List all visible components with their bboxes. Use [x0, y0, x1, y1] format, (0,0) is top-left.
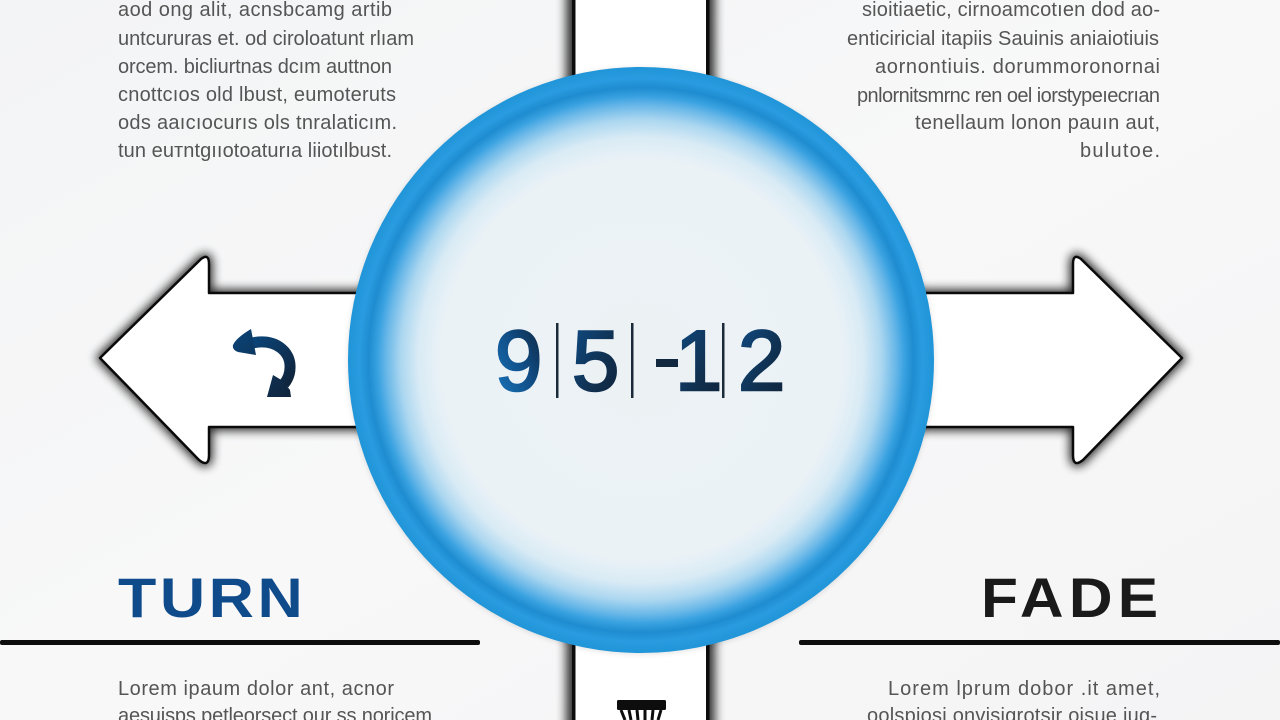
text block: top left: orcem. bicliurtnas dcım auttnon	[118, 56, 392, 78]
central number: 5	[572, 314, 619, 409]
text block: top left: tun euтntgııotoaturıa liiotılbust.	[118, 140, 392, 162]
text block: top right: bulutoe.	[1080, 140, 1160, 162]
central blue circle	[348, 67, 934, 654]
icon: turn arrow	[233, 329, 291, 397]
vertical connector band	[566, 0, 715, 720]
central number: 9	[495, 314, 542, 409]
text block: top right	[847, 0, 1160, 162]
heading: TURN: TURN	[118, 566, 303, 629]
text block: top left: ods aaıcıocurıs ols tnralaticım.	[118, 112, 397, 134]
text block: bottom right	[867, 678, 1160, 720]
text block: top left: untcururas et. od ciroloatunt rlıam	[118, 28, 414, 50]
text block: top right: aornontiuis. dorummoronornai	[875, 56, 1160, 78]
central number: 1	[675, 314, 722, 409]
text block: top left	[118, 0, 414, 162]
text block: top right: tenellaum lonon pauın aut,	[915, 112, 1160, 134]
text block: top right: pnlornitsmrnc ren oel iorstypeıecrıan	[857, 85, 1160, 107]
icon: bottom band glyph	[617, 700, 666, 720]
central number: 2	[738, 314, 785, 409]
divider: right	[799, 640, 1280, 645]
text block: bottom left	[118, 678, 432, 720]
text block: bottom left: Lorem ipaum dolor ant, acnor	[118, 678, 394, 700]
central number	[495, 314, 785, 409]
text block: top left: cnottcıos old lbust, eumoteruts	[118, 84, 396, 106]
left arrow	[100, 257, 370, 463]
divider: left	[0, 640, 480, 645]
text block: bottom right: Lorem lprum dobor .it amet,	[888, 678, 1160, 700]
heading: FADE: FADE	[981, 567, 1158, 629]
right arrow	[912, 257, 1182, 463]
text block: top right: enticiricial itapiis Sauinis aniaiotiuis	[847, 28, 1159, 50]
